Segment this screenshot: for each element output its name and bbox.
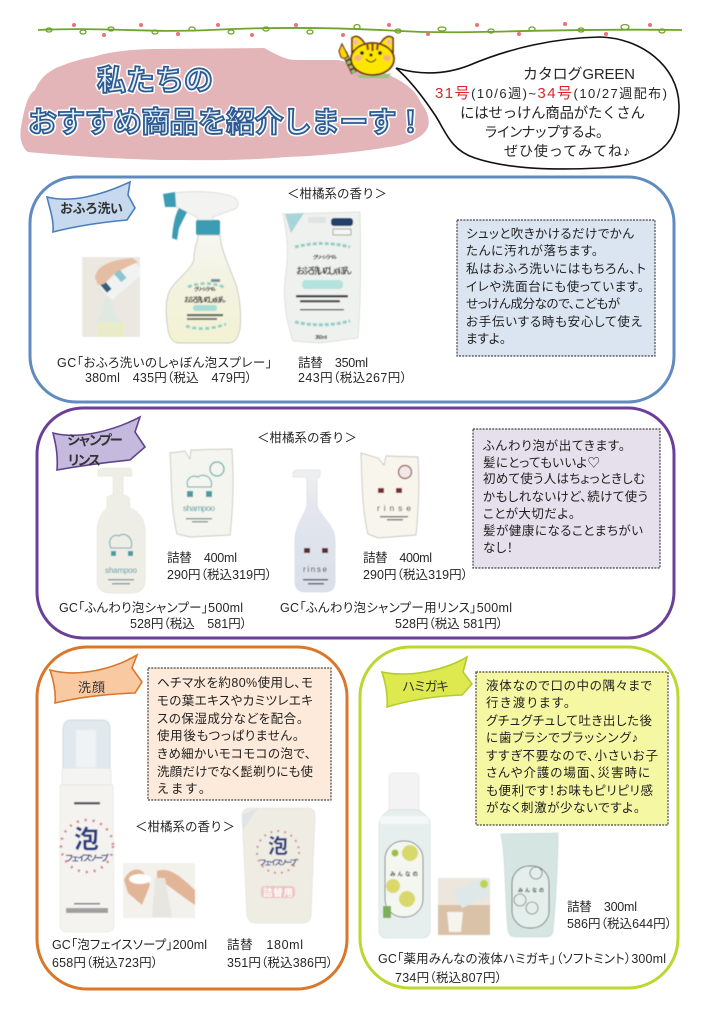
description box: 洗顔だけでなく髭剃りにも使 [157, 764, 313, 779]
refill price: 詰替 350ml [298, 355, 368, 370]
refill pouch: おふろ洗いのしゃぼん [296, 265, 352, 276]
description box: お手伝いする時も安心して使え [466, 314, 642, 329]
description box: モの葉エキスやカミツレエキ [157, 694, 313, 708]
rinse bottle: rinse [303, 565, 328, 574]
icon: squirrel mascot [339, 36, 394, 78]
foam soap bottle: フェイスソープ [65, 853, 109, 863]
description box: 髪にとってもいいよ♡ [483, 456, 600, 470]
title: おすすめ商品を紹介しまーす！ [28, 106, 425, 139]
product name and price: 380ml 435円（税込 479円） [85, 371, 252, 385]
liquid toothpaste bottle [379, 773, 430, 938]
description box: すすぎ不要なので、小さいお子 [486, 749, 658, 763]
refill price: 586円（税込644円） [567, 917, 672, 931]
refill pouch: 泡 [268, 835, 288, 858]
tab: face wash [50, 655, 142, 703]
panel outline [360, 647, 678, 988]
speech bubble: ぜひ使ってみてね♪ [504, 143, 630, 159]
product name and price: GC「おふろ洗いのしゃぼん泡スプレー」 [57, 356, 272, 370]
refill pouch [501, 833, 558, 937]
title blob [20, 48, 429, 160]
description box: ヘチマ水を約80%使用し、モ [157, 675, 313, 690]
description box: 行き渡ります。 [486, 696, 570, 710]
foam soap bottle: 泡 [74, 826, 99, 854]
description box: ことが大切だよ。 [483, 506, 575, 521]
refill price: 351円（税込386円） [227, 956, 333, 970]
description box: さんや介護の場面、災害時に [486, 765, 650, 780]
refill pouch: グリーンラベル [313, 254, 337, 261]
refill pouch: 350ml [315, 335, 327, 341]
description box: イレや洗面台にも使っています。 [466, 279, 644, 294]
description box: も便利です！お味もピリピリ感 [486, 783, 653, 798]
speech bubble: カタログGREEN [523, 66, 635, 83]
description box: がなく刺激が少ないですよ。 [486, 800, 640, 815]
description box [148, 668, 331, 800]
product name and price: 658円（税込723円） [52, 956, 158, 970]
scent note: ＜柑橘系の香り＞ [135, 819, 235, 834]
liquid toothpaste bottle: みんなの [390, 871, 418, 878]
product name and price: 734円（税込807円） [395, 971, 502, 985]
panel outline [37, 408, 674, 638]
refill price: 詰替 300ml [567, 899, 637, 914]
title: おすすめ商品を紹介しまーす！ [28, 106, 425, 139]
scent note: ＜柑橘系の香り＞ [257, 430, 357, 445]
product name and price [57, 356, 272, 385]
refill pouch: みんなの [518, 887, 544, 894]
description box: に歯ブラシでブラッシング♪ [486, 730, 638, 745]
description box: 使用後もつっぱりません。 [157, 728, 299, 743]
tab: bath cleaner [47, 182, 135, 232]
rinse refill price: 290円（税込319円） [363, 568, 468, 582]
shampoo bottle [97, 468, 145, 593]
tab: shampoo and rinse: シャンプー [67, 433, 123, 448]
shampoo refill price: 290円（税込319円） [167, 568, 272, 582]
description box: ますよ。 [466, 332, 506, 346]
tab: toothpaste [382, 657, 472, 707]
description box [476, 672, 668, 825]
photo: foam in hands [123, 863, 195, 918]
rinse refill pouch [361, 453, 419, 538]
photo: refilling bottle [82, 257, 140, 337]
tab: shampoo and rinse [53, 417, 145, 470]
refill price: 詰替 180ml [227, 937, 303, 952]
rinse bottle [293, 470, 335, 592]
refill price [298, 355, 407, 385]
shampoo bottle: shampoo [105, 566, 138, 575]
foam soap bottle [60, 720, 114, 932]
rinse name and price: 528円（税込 581円） [395, 617, 503, 631]
shampoo refill price: 詰替 400ml [167, 550, 237, 565]
garland [38, 22, 682, 37]
speech bubble: 31号(10/6週)~34号(10/27週配布) [435, 85, 667, 102]
description box: えます。 [157, 782, 205, 796]
product name and price: GC「薬用みんなの液体ハミガキ」（ソフトミント）300ml [378, 952, 666, 966]
tab: bath cleaner: おふろ洗い [60, 201, 123, 216]
description box: シュッと吹きかけるだけでかん [466, 227, 634, 241]
shampoo name and price: 528円（税込 581円） [130, 617, 247, 631]
description box: なし！ [483, 541, 513, 555]
tab: shampoo and rinse: リンス [67, 453, 101, 468]
description box: かもしれないけど、続けて使う [483, 489, 648, 504]
description box [473, 429, 660, 568]
refill price [227, 937, 333, 970]
description box: せっけん成分なので、こどもが [466, 296, 621, 311]
shampoo name and price: GC「ふんわり泡シャンプー」500ml [59, 601, 243, 615]
refill price [567, 899, 672, 931]
description box: たんに汚れが落ちます。 [466, 243, 598, 258]
shampoo name and price [59, 601, 247, 631]
refill pouch: フェイスソープ [259, 858, 298, 867]
speech bubble [396, 37, 679, 169]
shampoo refill price [167, 550, 272, 582]
panel outline [30, 177, 674, 402]
shampoo refill pouch [170, 449, 233, 537]
refill pouch [283, 212, 361, 343]
speech bubble: ラインナップするよ。 [484, 124, 610, 140]
rinse name and price: GC「ふんわり泡シャンプー用リンス」500ml [280, 601, 512, 615]
description box: 私はおふろ洗いにはもちろん、ト [466, 262, 646, 276]
description box: 初めて使う人はちょっときしむ [483, 471, 645, 486]
description box: スの保湿成分などを配合。 [157, 711, 303, 726]
description box: 髪が健康になることまちがい [483, 523, 643, 538]
photo: pouring into cup [438, 878, 490, 935]
refill price: 243円（税込267円） [298, 371, 407, 385]
description box: きめ細かいモコモコの泡で、 [157, 747, 311, 761]
title: 私たちの [97, 64, 213, 97]
description box [457, 220, 655, 356]
product name and price [378, 952, 666, 985]
panel: face wash [37, 647, 347, 989]
rinse refill price [363, 550, 468, 582]
description box: 液体なので口の中の隅々まで [486, 678, 652, 693]
speech bubble: にはせっけん商品がたくさん [460, 105, 645, 122]
title [28, 64, 425, 139]
panel: bath cleaner [30, 177, 674, 402]
rinse name and price [280, 601, 512, 631]
rinse refill price: 詰替 400ml [363, 550, 432, 565]
panel: toothpaste [360, 647, 678, 988]
panel: shampoo and rinse [37, 408, 674, 638]
tab: face wash: 洗顔 [78, 680, 105, 695]
product name and price: GC「泡フェイスソープ」200ml [52, 938, 207, 952]
spray bottle [163, 192, 241, 343]
description box: ふんわり泡が出てきます。 [482, 438, 625, 453]
tab: toothpaste: ハミガキ [402, 679, 449, 694]
spray bottle: おふろ洗いのしゃぼん [184, 295, 226, 304]
product name and price [52, 938, 207, 970]
title: 私たちの [97, 64, 213, 97]
shampoo refill pouch: shampoo [183, 503, 215, 513]
rinse refill pouch: rinse [377, 503, 411, 513]
scent note: ＜柑橘系の香り＞ [287, 186, 387, 201]
description box: グチュグチュして吐き出した後 [486, 714, 652, 728]
refill pouch: 詰替用 [263, 887, 293, 899]
panel outline [37, 647, 347, 989]
spray bottle: グリーンラベル [194, 286, 216, 293]
refill pouch [242, 808, 315, 923]
